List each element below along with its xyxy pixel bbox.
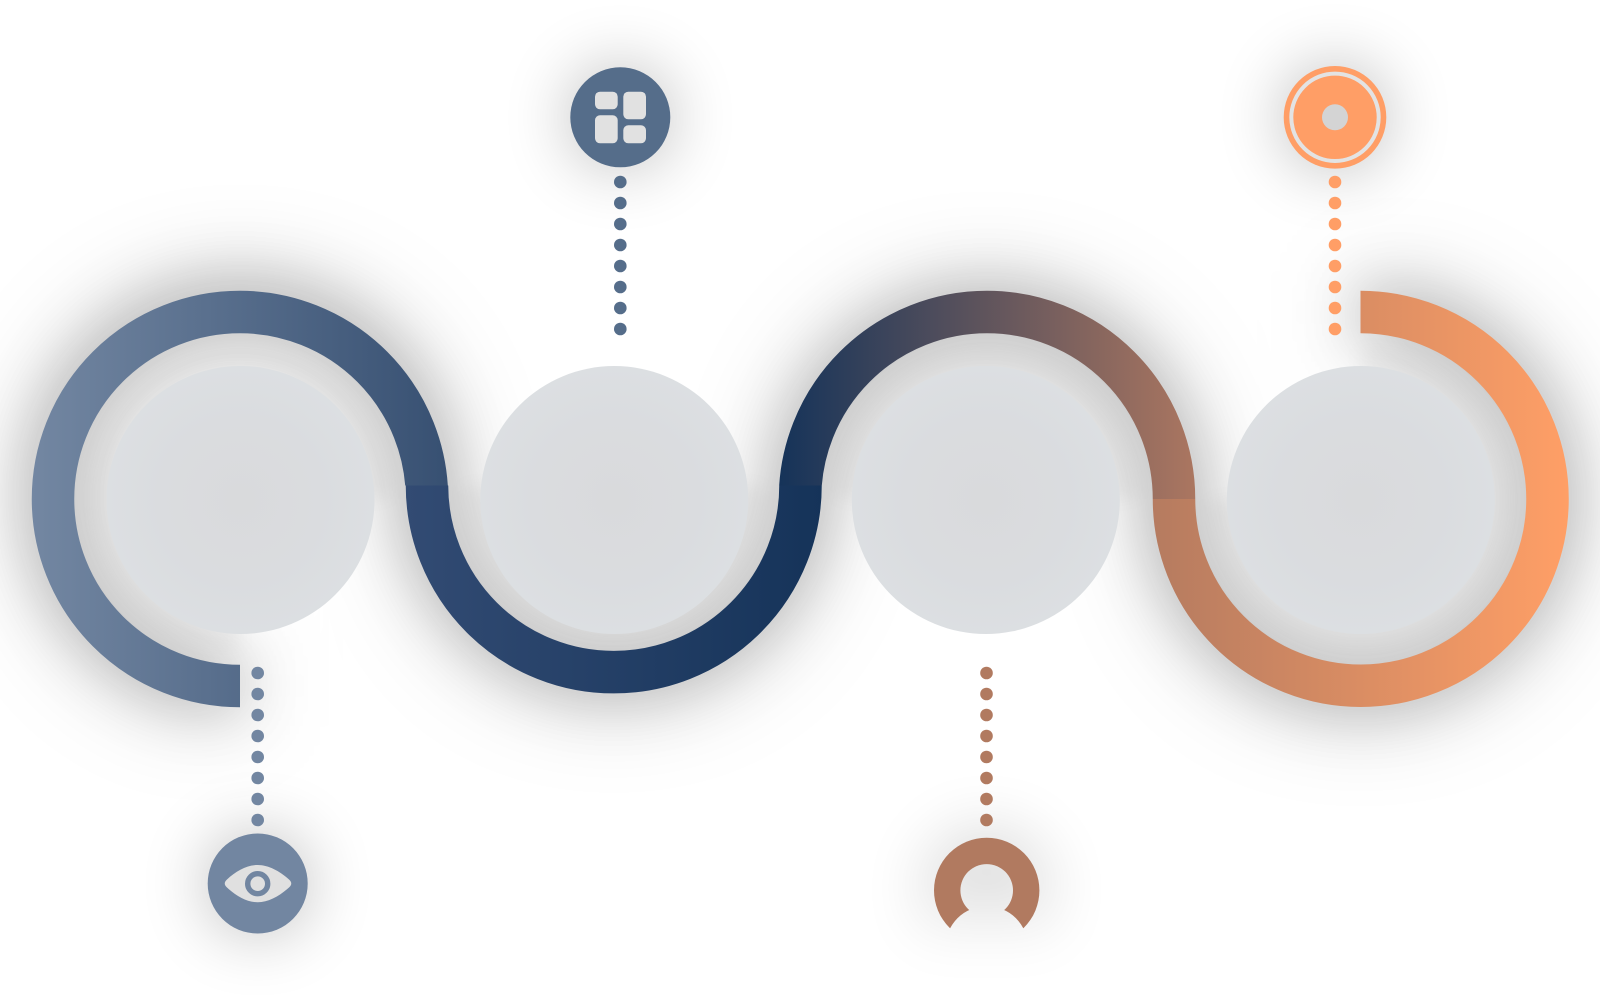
dotted connector 1 [251, 667, 264, 826]
arc 1 [53, 312, 427, 686]
dotted connector 4 [1329, 176, 1341, 335]
arc 3 [800, 312, 1174, 520]
arc 2 [427, 486, 800, 672]
disc 3 [852, 366, 1120, 634]
content discs [106, 366, 1495, 634]
disc 2 [480, 366, 748, 634]
icon: person [934, 838, 1039, 943]
disc 1 [106, 366, 374, 634]
serpentine path [53, 312, 1548, 686]
icon: target [1284, 66, 1386, 169]
dotted connector 3 [980, 667, 993, 826]
icon: eye [208, 834, 308, 934]
disc 4 [1227, 366, 1495, 634]
icon: dashboard grid [570, 67, 670, 167]
dotted connector 2 [614, 176, 627, 335]
path shadow [53, 305, 1548, 686]
arc 4 [1174, 312, 1548, 686]
